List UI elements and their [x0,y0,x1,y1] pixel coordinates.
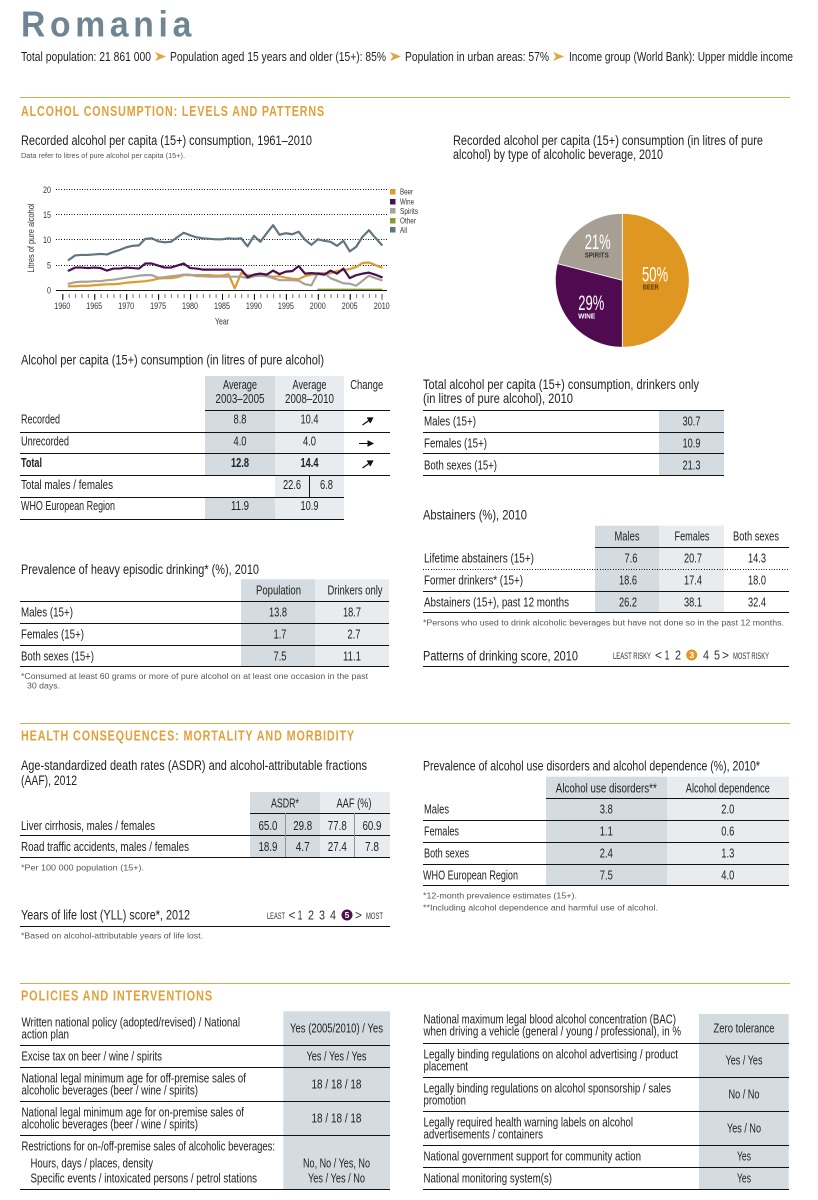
panel: alcohol per capita table: Total males / females [21,478,113,492]
panel: policies table right: Yes [737,1149,751,1163]
panel: policies table left: Written national policy (adopted/revised) / National [22,1016,240,1030]
country facts line: Total population: 21 861 000 [21,50,151,64]
panel: alcohol use disorders table: Alcohol dependence [686,782,770,796]
panel: policies table left: Yes / Yes / No [308,1171,365,1185]
x axis labels: 1980 [182,301,198,311]
panel: pie chart by beverage type [453,133,763,347]
x axis labels [54,301,390,311]
panel: ASDR and AAF table: AAF (%) [336,797,372,811]
panel: years of life lost score [20,907,390,940]
panel: policies table right: Zero tolerance [714,1022,775,1036]
panel: abstainers table: 7.6 [624,552,638,566]
panel: alcohol use disorders table [423,759,789,912]
panel: alcohol use disorders table: Females [424,824,459,838]
x axis labels: 2010 [374,301,390,311]
x axis labels: 2005 [342,301,358,311]
panel: policies table left: Hours, days / places, density [30,1156,154,1170]
panel: years of life lost score: > [355,907,362,922]
panel: abstainers table: 38.1 [684,596,702,610]
panel: abstainers table: Lifetime abstainers (15+) [424,552,534,566]
panel: alcohol per capita table: 8.8 [234,412,247,426]
panel: policies table left: Restrictions for on-/off-premise sales of alcoholic beverages: [22,1139,275,1153]
legend: Other [400,216,416,226]
icon: arrow [390,52,401,61]
panel: policies table left: alcoholic beverages (beer / wine / spirits) [22,1117,198,1131]
legend: Wine [400,198,414,206]
panel: heavy episodic drinking table: 7.5 [274,650,287,664]
legend: Beer [400,188,413,196]
label: wine: WINE [578,312,595,321]
panel: alcohol per capita table: 2003–2005 [216,392,265,406]
panel: policies table right: National government support for community action [424,1149,641,1163]
panel: alcohol per capita table: 22.6 [283,478,301,492]
x axis labels: 1990 [246,301,262,311]
icon: arrow right [359,441,373,446]
line: other [318,288,382,290]
panel: alcohol per capita table: 6.8 [320,478,333,492]
panel: policies table right: when driving a vehicle (general / young / professional), in % [423,1025,681,1039]
legend [390,188,418,235]
panel: policies table left: 18 / 18 / 18 [312,1111,362,1125]
panel: alcohol use disorders table: 2.0 [721,802,734,816]
panel: drinkers only table: Both sexes (15+) [424,458,497,472]
icon: arrow up [362,461,372,468]
panel: abstainers table: 18.0 [748,574,766,588]
panel: alcohol use disorders table: 2.4 [600,846,613,860]
panel: alcohol per capita table: WHO European Region [21,499,115,513]
label: spirits [585,231,611,260]
panel: patterns of drinking score [423,647,789,666]
panel: heavy episodic drinking table: 11.1 [343,650,361,664]
country facts line: Population aged 15 years and older (15+): 85% [170,50,386,64]
panel: heavy episodic drinking table: 1.7 [274,628,287,642]
panel: alcohol per capita table: 10.9 [300,499,319,513]
panel: alcohol use disorders table: 4.0 [721,868,734,882]
y axis labels: 0 [47,286,51,296]
panel: policies table left: Yes / Yes / Yes [306,1049,366,1063]
panel: policies table left: Yes (2005/2010) / Yes [290,1021,383,1035]
panel: ASDR and AAF table: 27.4 [328,840,347,854]
panel: ASDR and AAF table: 60.9 [362,819,382,833]
panel: alcohol use disorders table: 0.6 [721,824,734,838]
panel: alcohol use disorders table: Males [424,802,449,816]
footnotes [423,891,658,912]
panel: policies table left: 18 / 18 / 18 [312,1077,362,1091]
panel: patterns of drinking score: 4 [703,647,709,662]
score marker: 5: 5 [345,910,350,920]
panel: alcohol per capita table: Unrecorded [21,434,69,448]
panel: heavy episodic drinking table: Drinkers only [328,584,383,598]
table heading: Alcohol per capita (15+) consumption (in litres of pure alcohol) [21,352,324,368]
panel: policies table right: advertisements / containers [424,1127,543,1141]
panel: heavy episodic drinking table [20,562,389,690]
footnote [21,672,369,690]
panel: alcohol per capita table: 2008–2010 [285,392,334,406]
country facts line [21,50,793,64]
panel: years of life lost score: 4 [330,907,336,922]
panel: years of life lost score: < [288,907,296,922]
panel: policies table right: placement [424,1059,468,1073]
footnote: *Per 100 000 population (15+). [21,864,144,873]
panel: years of life lost score: LEAST [267,911,285,922]
x axis labels: 1960 [54,301,70,311]
panel: abstainers table: 17.4 [684,574,702,588]
table heading: Abstainers (%), 2010 [423,508,527,522]
table heading: Prevalence of heavy episodic drinking* (%), 2010 [21,562,259,577]
panel: patterns of drinking score: LEAST RISKY [613,651,651,662]
panel: line chart consumption 1961-2010 [21,133,418,326]
line: beer [69,263,382,288]
panel: policies table right: National maximum legal blood alcohol concentration (BAC) [424,1013,676,1027]
panel: policies table left: Specific events / intoxicated persons / petrol stations [30,1171,257,1185]
panel: alcohol per capita table: 12.8 [231,456,249,470]
panel: patterns of drinking score: > [722,647,729,662]
panel: alcohol per capita table: Recorded [21,412,60,426]
label: beer [642,264,668,292]
panel: ASDR and AAF table: 29.8 [293,819,312,833]
panel: years of life lost score: Years of life lost (YLL) score*, 2012 [21,907,190,922]
slice: beer [622,213,689,347]
line: spirits [69,273,382,286]
panel: abstainers table: 32.4 [748,596,766,610]
panel: patterns of drinking score: < [655,647,662,662]
label: beer: 50% [642,264,668,287]
pie heading [453,133,763,162]
panel: years of life lost score: MOST [366,911,383,922]
pie heading: alcohol) by type of alcoholic beverage, 2010 [453,147,663,162]
panel: drinkers only table: Males (15+) [424,415,476,429]
footnotes: **Including alcohol dependence and harmful use of alcohol. [423,903,658,912]
score marker: 3 [686,650,697,660]
panel: drinkers only table: Females (15+) [424,436,487,450]
x axis labels: 1970 [118,301,134,311]
panel: policies table left: National legal minimum age for off-premise sales of [22,1071,246,1085]
panel: drinkers only table [423,377,724,476]
x axis labels: 1995 [278,301,294,311]
panel: ASDR and AAF table: Liver cirrhosis, males / females [21,819,155,833]
panel: alcohol per capita table: 10.4 [300,412,319,426]
footnote: *Based on alcohol-attributable years of life lost. [21,931,203,940]
panel: policies table left: alcoholic beverages (beer / wine / spirits) [22,1083,198,1097]
panel: ASDR and AAF table: ASDR* [271,797,299,811]
panel: alcohol per capita table [20,352,390,520]
panel: patterns of drinking score: 1 [664,647,670,662]
panel: patterns of drinking score: MOST RISKY [733,651,769,662]
panel: heavy episodic drinking table: Population [256,584,301,598]
panel: years of life lost score: 2 [308,907,314,922]
x axis labels: 2000 [310,301,326,311]
panel: ASDR and AAF table: Road traffic accidents, males / females [21,840,189,854]
panel: alcohol per capita table: Average [223,378,257,392]
panel: ASDR and AAF table: 7.8 [365,840,379,854]
slice: wine [555,264,622,347]
panel: alcohol use disorders table: Alcohol use disorders** [556,782,657,796]
panel: alcohol per capita table: Total [21,456,42,470]
panel: policies table right: National monitoring system(s) [424,1171,552,1185]
table heading: Age-standardized death rates (ASDR) and alcohol-attributable fractions [21,758,367,773]
legend: All [400,226,407,235]
label: wine: 29% [578,292,604,315]
panel: alcohol use disorders table: 1.1 [600,824,613,838]
panel: abstainers table: 18.6 [619,574,637,588]
label: spirits: SPIRITS [585,251,609,260]
panel: drinkers only table: 21.3 [682,458,701,472]
panel: abstainers table: Both sexes [733,530,779,544]
panel: policies table left: No, No / Yes, No [303,1156,370,1170]
panel: heavy episodic drinking table: 2.7 [348,628,361,642]
icon: arrow up [362,418,372,425]
panel: abstainers table: 26.2 [619,596,637,610]
table heading [423,377,699,406]
panel: policies table left [20,1011,390,1190]
score marker: 5 [342,910,352,920]
panel: patterns of drinking score: 2 [675,647,681,662]
panel: drinkers only table: 10.9 [682,436,701,450]
panel: patterns of drinking score: Patterns of drinking score, 2010 [423,649,578,664]
legend: Spirits [400,207,418,216]
score marker: 3: 3 [689,650,694,660]
slice: spirits [557,213,622,280]
panel: alcohol use disorders table: Both sexes [424,846,469,860]
panel: abstainers table [423,508,789,628]
x axis labels: 1965 [86,301,102,311]
panel: patterns of drinking score: 5 [714,647,720,662]
panel: heavy episodic drinking table: Both sexes (15+) [21,650,94,664]
panel: years of life lost score: 1 [298,907,302,922]
panel: policies table right: Yes / No [727,1121,761,1135]
panel: ASDR and AAF table: 77.8 [328,819,347,833]
panel: policies table left: National legal minimum age for on-premise sales of [22,1105,244,1119]
y axis labels: 20 [43,185,51,195]
panel: alcohol per capita table: 4.0 [303,434,316,448]
heading: health consequences: HEALTH CONSEQUENCES: MORTALITY AND MORBIDITY [21,729,355,745]
heading: alcohol consumption: ALCOHOL CONSUMPTION: LEVELS AND PATTERNS [21,104,325,120]
panel: heavy episodic drinking table: 13.8 [269,606,287,620]
label: beer: BEER [643,283,659,292]
panel: policies table right: promotion [424,1093,466,1107]
panel: policies table left: Excise tax on beer / wine / spirits [22,1049,162,1063]
panel: alcohol per capita table: Average [292,378,327,392]
panel: heavy episodic drinking table: Females (15+) [21,628,84,642]
panel: drinkers only table: 30.7 [682,415,701,429]
chart heading: Recorded alcohol per capita (15+) consumption, 1961–2010 [21,133,312,148]
footnote: 30 days. [27,682,60,690]
table heading: (AAF), 2012 [21,773,77,788]
panel: abstainers table: Abstainers (15+), past 12 months [424,596,569,610]
table heading [21,758,367,788]
y axis labels: 5 [47,260,51,270]
panel: alcohol use disorders table: 1.3 [721,846,734,860]
label: wine [578,292,604,321]
icon: arrow [553,52,564,61]
y axis labels [43,185,51,296]
panel: alcohol per capita table: Change [350,378,383,392]
table heading: (in litres of pure alcohol), 2010 [423,391,573,406]
panel: alcohol per capita table: 4.0 [234,434,247,448]
panel: abstainers table: Former drinkers* (15+) [424,574,523,588]
y axis title: Litres of pure alcohol [26,204,36,272]
line: wine [69,264,382,278]
panel: ASDR and AAF table [20,758,390,873]
panel: abstainers table: Females [674,530,710,544]
table heading: Total alcohol per capita (15+) consumption, drinkers only [423,377,699,392]
x axis title: Year [215,316,229,326]
x axis labels: 1985 [214,301,230,311]
icon: arrow [155,52,166,61]
panel: abstainers table: 14.3 [748,552,766,566]
panel: alcohol use disorders table: 3.8 [600,802,613,816]
panel: alcohol use disorders table: 7.5 [600,868,613,882]
footnote: *Persons who used to drink alcoholic beverages but have not done so in the past 12 months. [423,619,784,628]
heading: policies: POLICIES AND INTERVENTIONS [21,989,213,1005]
panel: policies table right: Legally binding regulations on alcohol sponsorship / sales [424,1081,671,1095]
line: all [69,225,382,260]
y axis labels: 10 [43,235,51,245]
chart note: Data refer to litres of pure alcohol per capita (15+). [21,151,185,160]
panel: policies table right: No / No [728,1087,760,1101]
footnotes: *12-month prevalence estimates (15+). [423,891,577,900]
y axis labels: 15 [43,210,51,220]
label: spirits: 21% [585,231,611,254]
panel: heavy episodic drinking table: Males (15+) [21,606,73,620]
panel: years of life lost score: 3 [319,907,325,922]
panel: ASDR and AAF table: 65.0 [258,819,278,833]
panel: policies table right [423,1013,789,1190]
panel: policies table right: Legally required health warning labels on alcohol [424,1115,633,1129]
title: Romania [21,4,196,44]
panel: abstainers table: Males [614,530,640,544]
panel: alcohol per capita table: 14.4 [300,456,319,470]
panel: policies table left: action plan [22,1027,69,1041]
panel: alcohol per capita table: 11.9 [231,499,249,513]
panel: heavy episodic drinking table: 18.7 [343,606,361,620]
panel: ASDR and AAF table: 4.7 [296,840,310,854]
footnote: *Consumed at least 60 grams or more of pure alcohol on at least one occasion in the past [21,672,369,681]
panel: alcohol use disorders table: WHO European Region [423,868,518,882]
country facts line: Population in urban areas: 57% [405,50,549,64]
panel: abstainers table: 20.7 [684,552,702,566]
x axis labels: 1975 [150,301,166,311]
panel: policies table right: Yes [737,1171,751,1185]
panel: ASDR and AAF table: 18.9 [258,840,278,854]
panel: policies table right: Yes / Yes [726,1053,762,1067]
panel: policies table right: Legally binding regulations on alcohol advertising / product [424,1047,678,1061]
